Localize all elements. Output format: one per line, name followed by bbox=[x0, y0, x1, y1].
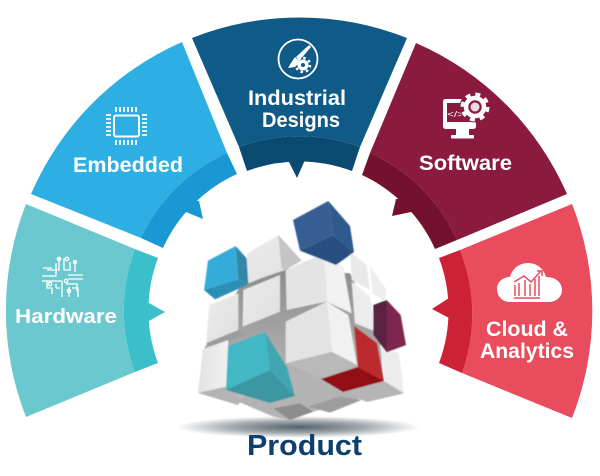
icon: monitor and gear: </> bbox=[447, 110, 464, 119]
label: industrial: Industrial bbox=[248, 87, 346, 110]
shadow under cube bbox=[176, 416, 420, 438]
title: product: Product bbox=[247, 430, 362, 462]
grey body behind the blocks bbox=[198, 268, 383, 420]
panel: embedded bbox=[31, 42, 237, 248]
panel: software bbox=[362, 43, 567, 249]
panel: hardware bbox=[6, 204, 165, 417]
icon: brush and gear bbox=[278, 40, 318, 78]
icon: cloud chart bbox=[497, 263, 562, 302]
panel: cloud and analytics bbox=[432, 204, 592, 418]
icon: circuit bbox=[42, 257, 83, 297]
panel: industrial designs bbox=[192, 17, 407, 178]
label: cloud: Cloud & bbox=[486, 318, 568, 341]
icon: monitor and gear bbox=[443, 92, 490, 138]
cube bbox=[198, 201, 406, 420]
label: designs: Designs bbox=[262, 109, 340, 132]
label: embedded: Embedded bbox=[73, 154, 183, 177]
label: analytics: Analytics bbox=[480, 340, 574, 363]
label: hardware: Hardware bbox=[15, 306, 117, 328]
label: software: Software bbox=[419, 152, 512, 175]
icon: chip bbox=[106, 107, 147, 145]
